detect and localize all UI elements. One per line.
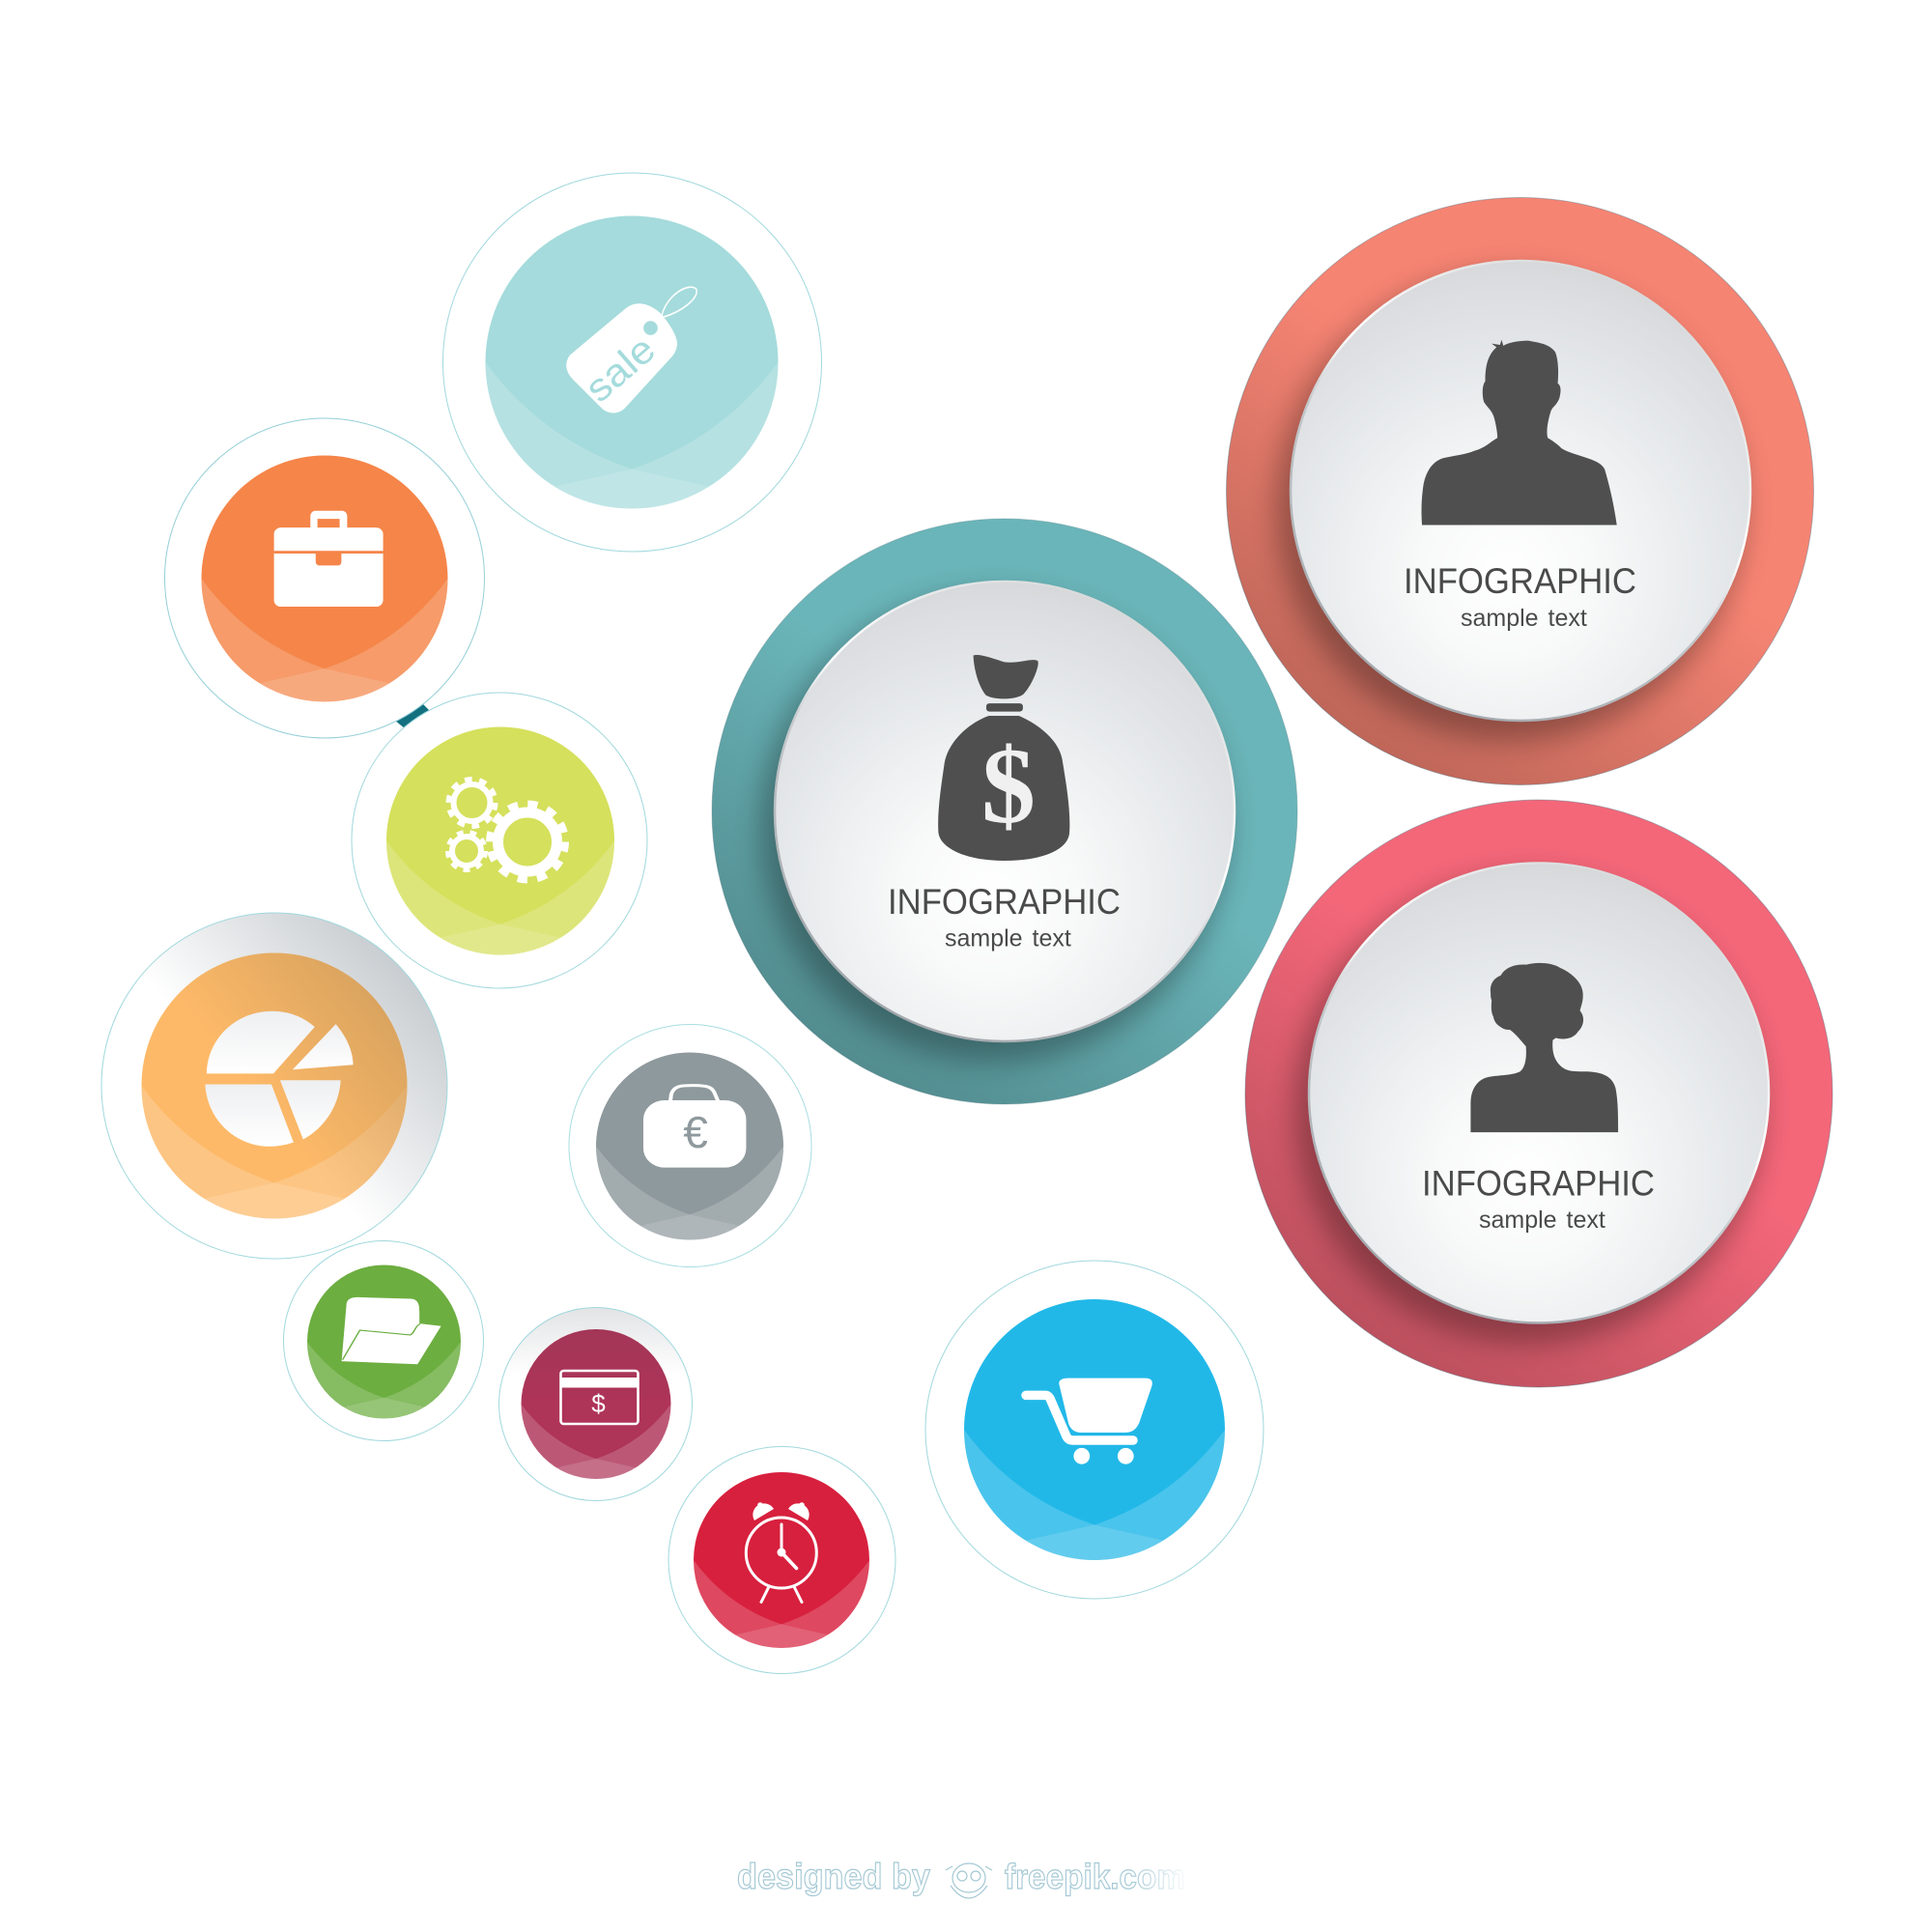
panel: pie chart circle: [101, 913, 447, 1259]
panel: alarm clock circle: [668, 1447, 895, 1673]
icon: pie chart: [205, 1011, 354, 1147]
panel: man profile card (salmon): [1227, 197, 1814, 784]
icon: shopping cart: [1026, 1378, 1152, 1464]
panel: woman profile card (pink): [1245, 800, 1833, 1387]
icon: woman silhouette: [1470, 963, 1618, 1132]
watermark: designed by freepik.com: [737, 1857, 1185, 1898]
text: sample text: text: [1548, 605, 1587, 632]
text: sample text: text: [1567, 1207, 1605, 1234]
watermark: designed by freepik.com: freepik.com: [1005, 1857, 1185, 1896]
icon: sale tag: sale: [578, 327, 664, 411]
panel: briefcase circle: [164, 418, 485, 738]
icon: euro bag: €: [683, 1107, 708, 1157]
icon: man silhouette: [1422, 340, 1617, 525]
icon: money bag: [938, 655, 1069, 861]
panel: sale tag circle: [442, 173, 821, 552]
icon: briefcase: [274, 511, 384, 607]
connector between orange and lime circles: [395, 703, 429, 728]
icon: alarm clock: [746, 1502, 816, 1602]
panel: shopping cart circle: [925, 1261, 1264, 1599]
icon: gears: [448, 781, 564, 879]
panel: money bag card (teal): [712, 519, 1297, 1104]
icon: dollar card: $: [591, 1389, 606, 1418]
heading: infographic: INFOGRAPHIC: [1422, 1163, 1655, 1204]
text: sample text: sample: [1479, 1207, 1557, 1234]
text: sample text: sample: [1461, 605, 1539, 632]
icon: euro bag: [643, 1086, 746, 1168]
panel: folder circle: [284, 1240, 483, 1441]
icon: sale tag: [566, 287, 696, 412]
heading: infographic: INFOGRAPHIC: [888, 882, 1121, 922]
icon: freepik logo: [946, 1863, 992, 1898]
panel: gears circle: [352, 693, 647, 988]
icon: money bag: $: [981, 726, 1036, 846]
panel: euro bag circle: [569, 1024, 811, 1267]
text: sample text: sample: [945, 925, 1023, 952]
heading: infographic: INFOGRAPHIC: [1404, 561, 1636, 601]
text: sample text: text: [1032, 925, 1071, 952]
icon: folder: [342, 1297, 441, 1364]
watermark: designed by freepik.com: designed by: [737, 1857, 930, 1896]
icon: dollar card: [560, 1371, 638, 1424]
panel: credit card circle: [498, 1308, 692, 1501]
